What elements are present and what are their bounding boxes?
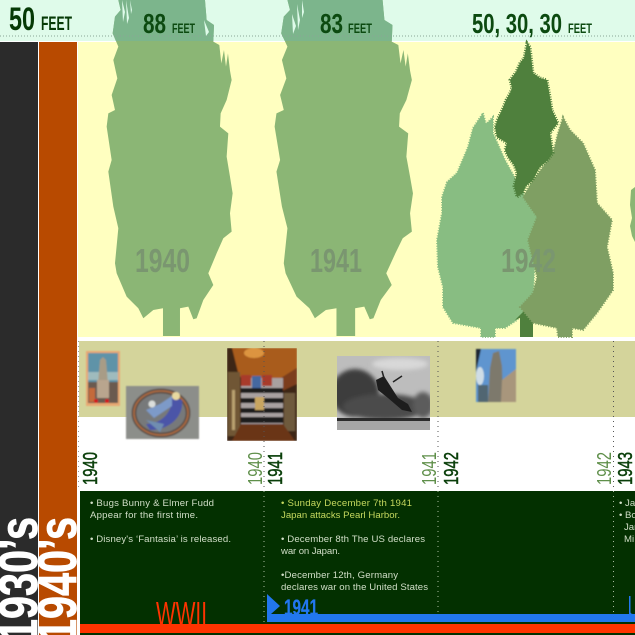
yellow tree field	[78, 42, 635, 337]
year: 1940 start: 1940	[79, 452, 102, 485]
events: 1940	[90, 498, 231, 545]
WWII label: WWII	[156, 595, 207, 632]
year: 1941 start: 1941	[264, 452, 287, 485]
decade column: 1940's	[39, 42, 77, 635]
photo: Rockefeller postcard	[86, 351, 120, 406]
events: 1941	[280, 498, 428, 593]
tree: partial at right edge	[630, 187, 635, 242]
year: 1940 end: 1940	[244, 452, 267, 485]
events: 1941: • December 8th The US declares	[281, 534, 425, 545]
red WWII bar	[80, 624, 635, 633]
blue 1941 timeline bar with arrow	[267, 594, 635, 622]
photo: elevator lobby	[227, 348, 297, 441]
photo band	[79, 341, 635, 417]
heading: 88 feet: FEET	[172, 20, 195, 36]
events: 1941: declares war on the United States	[281, 582, 428, 593]
events: 1941: war on Japan.	[280, 546, 340, 557]
events: 1943 (cropped): Mi	[624, 534, 634, 545]
events: 1941: • Sunday December 7th 1941	[281, 498, 412, 509]
tree year labels: 1942	[501, 242, 556, 279]
events: 1940: Appear for the first time.	[90, 510, 198, 521]
tree year labels	[135, 242, 556, 279]
height scale band	[0, 0, 635, 41]
tree: olive 1942	[520, 117, 613, 337]
photo: Pearl Harbor	[331, 356, 433, 430]
heading: 83 feet	[320, 8, 372, 39]
heading: 50 feet: FEET	[41, 14, 72, 35]
height scale dotted line	[0, 35, 635, 37]
tree: 1940	[107, 0, 233, 336]
heading: 50, 30, 30 feet: FEET	[568, 20, 592, 36]
heading: 50 feet: 50	[9, 1, 35, 37]
year: 1942 start: 1942	[440, 452, 463, 485]
heading: 83 feet: 83	[320, 8, 343, 39]
tree: 1941	[275, 0, 413, 336]
events panel	[80, 491, 635, 635]
year: 1941 end: 1941	[418, 452, 441, 485]
tree year labels: 1941	[310, 242, 362, 279]
rotated year labels	[79, 452, 635, 485]
year: 1942 end: 1942	[593, 452, 616, 485]
heading: 50 feet	[9, 1, 72, 37]
heading: 50, 30, 30 feet: 50, 30, 30	[472, 8, 562, 39]
events: 1941: Japan attacks Pearl Harbor.	[281, 510, 400, 521]
events: 1940: • Disney's ‘Fantasia’ is released.	[90, 534, 231, 545]
dotted dividers in events panel	[264, 491, 614, 622]
events: 1941: •December 12th, Germany	[281, 570, 398, 581]
decade column: 1930's	[0, 42, 38, 635]
tree year labels: 1940	[135, 242, 190, 279]
heading: 88 feet	[143, 8, 195, 39]
dotted year dividers	[78, 341, 614, 490]
photo: medallion	[126, 386, 199, 439]
events: 1943 (cropped): • Ja	[619, 498, 635, 509]
tree: dark trunk 1942	[515, 310, 533, 337]
blue 1941 timeline bar with arrow: 1941	[284, 595, 318, 620]
heading: 88 feet: 88	[143, 8, 166, 39]
tree tops inside height band	[112, 0, 392, 41]
tree: dark 1942	[495, 43, 558, 197]
trees: 1942 group	[437, 43, 613, 337]
tree: light 1942	[437, 113, 537, 337]
events: 1943 (cropped)	[619, 498, 635, 545]
heading: 83 feet: FEET	[348, 20, 372, 36]
events: 1940: • Bugs Bunny & Elmer Fudd	[90, 498, 214, 509]
photo: skyscraper	[476, 349, 516, 402]
